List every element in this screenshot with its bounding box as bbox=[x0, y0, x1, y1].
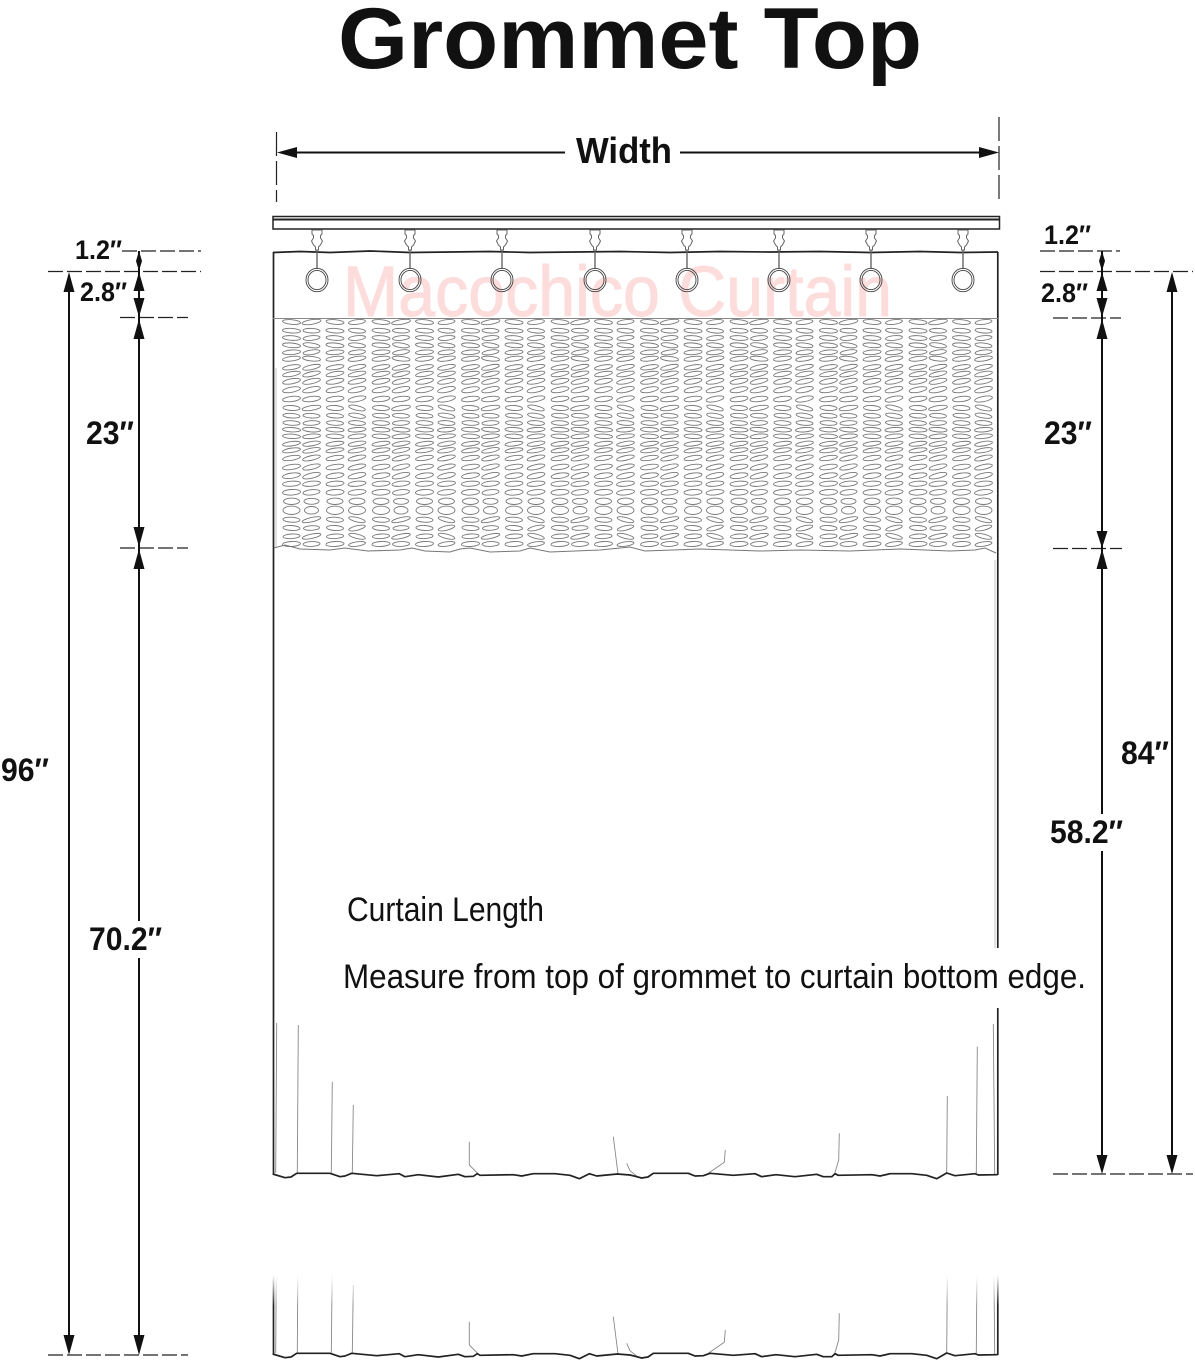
width dimension bbox=[276, 117, 999, 202]
mesh panel bbox=[282, 318, 993, 547]
left dimension labels: 1.2″ bbox=[75, 235, 122, 265]
right inner measurement arrow bbox=[1096, 251, 1108, 1174]
left outer measurement arrow bbox=[64, 272, 74, 1355]
curtain bottom hem bbox=[273, 1023, 998, 1179]
curtain right edge bbox=[997, 252, 999, 1175]
right dimension labels: 84″ bbox=[1121, 735, 1169, 771]
arrow: width left bbox=[277, 147, 565, 158]
right dimension labels: 1.2″ bbox=[1044, 220, 1091, 250]
curtain length note: Measure from top of grommet to curtain bottom edge. bbox=[343, 958, 1086, 996]
extended curtain bottom hem bbox=[272, 1276, 999, 1360]
left inner measurement arrow bbox=[134, 251, 144, 1355]
right dimension labels bbox=[1041, 220, 1169, 850]
left dimension labels bbox=[1, 235, 162, 957]
right dimension guides bbox=[1040, 251, 1193, 1174]
left dimension labels: 2.8″ bbox=[80, 277, 127, 307]
width label: Width bbox=[576, 130, 672, 171]
right outer measurement arrow bbox=[1166, 272, 1178, 1174]
curtain length note: Curtain Length bbox=[347, 891, 544, 929]
left dimension labels: 23″ bbox=[86, 415, 134, 451]
watermark: Macochico Curtain bbox=[343, 253, 892, 332]
arrow: width right bbox=[680, 147, 999, 158]
inner drape lines bbox=[276, 368, 995, 948]
mesh bottom edge bbox=[274, 545, 996, 553]
grommets and hooks bbox=[306, 230, 974, 292]
right dimension labels: 58.2″ bbox=[1050, 814, 1123, 850]
right dimension labels: 2.8″ bbox=[1041, 278, 1088, 308]
curtain top edge bbox=[273, 251, 998, 252]
left dimension labels: 70.2″ bbox=[89, 921, 162, 957]
curtain left edge bbox=[272, 252, 274, 1175]
curtain length note bbox=[343, 891, 1086, 996]
curtain drawing bbox=[273, 251, 998, 1175]
curtain rail bbox=[273, 216, 1000, 229]
right dimension labels: 23″ bbox=[1044, 415, 1092, 451]
mesh top seam bbox=[273, 318, 998, 320]
left dimension guides bbox=[48, 251, 201, 1355]
left dimension labels: 96″ bbox=[1, 752, 49, 788]
